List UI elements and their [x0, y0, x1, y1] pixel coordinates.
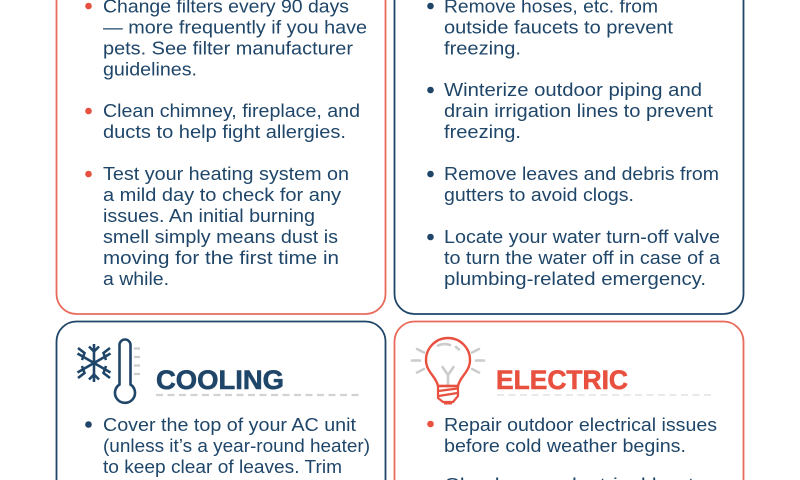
bullet: locate valve	[427, 227, 721, 289]
heading: cooling: COOLING	[156, 365, 284, 395]
bullet: change filters: pets. See filter manufacturer	[103, 38, 353, 58]
bullet: clean chimney: ducts to help fight allergies.	[103, 122, 346, 142]
heading: electric: ELECTRIC	[496, 365, 628, 395]
panel: plumbing	[394, 0, 744, 314]
bullet: winterize piping	[427, 80, 713, 142]
panel: heating	[56, 0, 386, 314]
bullet: locate valve: plumbing-related emergency.	[444, 269, 706, 289]
bullet: remove leaves: Remove leaves and debris from	[444, 164, 719, 184]
bullet: repair electrical issues: before cold weather begins.	[444, 436, 686, 456]
bullet: change filters: — more frequently if you have	[103, 18, 367, 38]
bullet: winterize piping: Winterize outdoor piping and	[444, 80, 702, 100]
bullet: test heating system	[85, 164, 349, 289]
bullet: cover AC unit	[85, 415, 370, 477]
bullet: winterize piping: drain irrigation lines to prevent	[444, 101, 713, 121]
bullet: test heating system: smell simply means dust is	[103, 227, 338, 247]
bullet: repair electrical issues: Repair outdoor electrical issues	[444, 415, 717, 435]
bullet: test heating system: a while.	[103, 269, 169, 289]
bullet: cover AC unit: to keep clear of leaves. Trim	[103, 457, 342, 477]
bullet: test heating system: moving for the first time in	[103, 248, 339, 268]
bullet: locate valve: Locate your water turn-off valve	[444, 227, 720, 247]
bullet: remove hoses: freezing.	[444, 38, 521, 58]
bullet: remove hoses	[427, 0, 673, 58]
bullet: change filters: guidelines.	[103, 60, 197, 80]
panel: electric	[394, 322, 744, 480]
bullet: cover AC unit: Cover the top of your AC unit	[103, 415, 356, 435]
icon: light bulb	[412, 338, 484, 403]
bullet: repair electrical issues	[427, 415, 717, 456]
icon: snowflake and thermometer	[78, 340, 140, 403]
bullet: test heating system: issues. An initial burning	[103, 206, 315, 226]
bullet: test heating system: Test your heating system on	[103, 164, 349, 184]
bullet: remove leaves	[427, 164, 719, 205]
bullet: test heating system: a mild day to check for any	[103, 185, 341, 205]
bullet: clean chimney: Clean chimney, fireplace, and	[103, 101, 360, 121]
bullet: locate valve: to turn the water off in case of a	[444, 248, 721, 268]
bullet: change filters	[85, 0, 367, 80]
bullet: clean chimney	[85, 101, 360, 142]
bullet: cover AC unit: (unless it’s a year-round heater)	[103, 436, 370, 456]
bullet: remove leaves: gutters to avoid clogs.	[444, 185, 634, 205]
bullet: remove hoses: outside faucets to prevent	[444, 18, 673, 38]
panel: cooling	[56, 322, 386, 480]
bullet: winterize piping: freezing.	[444, 122, 521, 142]
